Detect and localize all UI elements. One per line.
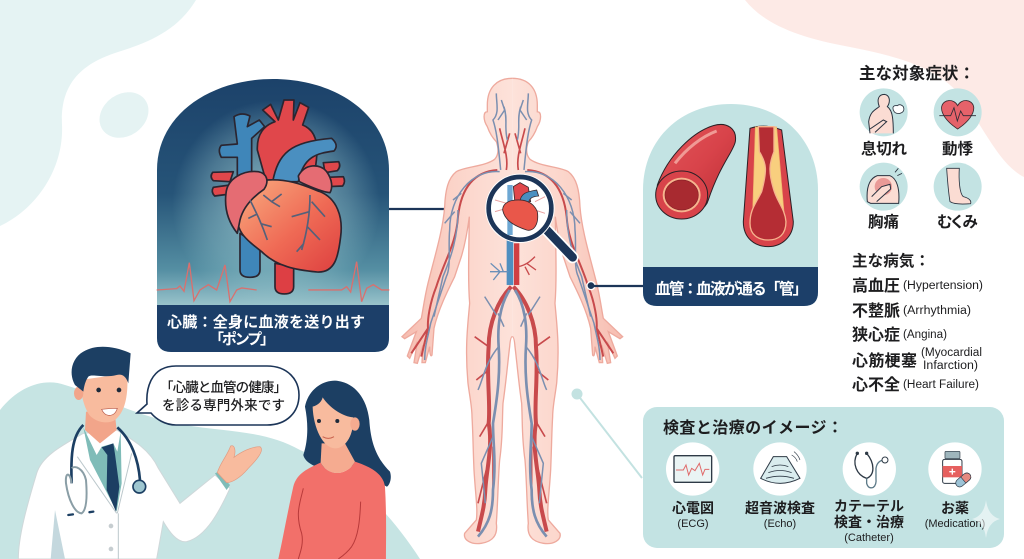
coat lapels <box>77 453 132 559</box>
sweater <box>278 462 386 559</box>
background blob: bottom left <box>0 382 420 559</box>
label: ECG: 心電図 <box>672 500 714 516</box>
label: catheter <box>834 498 904 544</box>
label: shortness of breath: 息切れ <box>861 139 907 158</box>
eyes <box>96 388 121 392</box>
label: echo <box>745 500 815 530</box>
hair <box>72 347 131 392</box>
heart illustration <box>211 100 344 294</box>
neck <box>321 443 355 473</box>
icon: echo <box>753 442 807 496</box>
background blob: top left <box>0 0 196 226</box>
disease: myocardial infarction: 心筋梗塞 <box>852 351 917 370</box>
panel: tests and treatment <box>643 407 1004 548</box>
bubble text line 2: を診る専門外来です <box>162 397 285 413</box>
healthy vessel <box>656 125 736 219</box>
label: swelling: むくみ <box>937 213 978 231</box>
coat shadow <box>51 510 65 559</box>
buttons <box>109 524 113 551</box>
shirt <box>83 427 122 512</box>
disease: hypertension <box>852 276 983 295</box>
panel: heart <box>157 79 389 352</box>
cuff <box>215 472 230 490</box>
human body with circulatory system <box>402 78 623 544</box>
bubble text line 1: 「心臓と血管の健康」 <box>160 379 287 395</box>
mini heart <box>495 183 545 235</box>
disease: hypertension: (Hypertension) <box>903 280 983 292</box>
icon: ECG <box>666 442 719 496</box>
sparkle <box>972 500 1000 538</box>
vessel marker dot <box>587 282 595 290</box>
panel background <box>643 104 818 306</box>
disease: arrhythmia <box>852 302 971 320</box>
hair <box>303 381 391 487</box>
disease: angina <box>852 326 947 344</box>
label text line 2: 「ポンプ」 <box>209 331 275 348</box>
tie <box>102 443 119 512</box>
label: chest pain: 胸痛 <box>868 213 899 231</box>
face <box>313 397 353 448</box>
label: catheter: (Catheter) <box>844 532 894 544</box>
disease: hypertension: 高血圧 <box>852 276 900 295</box>
label: medication: お薬 <box>941 500 969 516</box>
connector: heart panel to magnifier <box>389 208 490 210</box>
coat <box>18 430 230 559</box>
connector: vessel marker to vessel panel <box>591 285 644 287</box>
label: palpitation: 動悸 <box>942 140 973 158</box>
disease: angina: 狭心症 <box>852 326 900 344</box>
face <box>80 373 127 422</box>
disease: heart failure: 心不全 <box>852 375 900 394</box>
body mirrored half <box>402 78 512 544</box>
label text: 心臓：全身に血液を送り出す <box>167 313 365 331</box>
disease: myocardial infarction <box>852 347 982 372</box>
panel background <box>157 79 389 352</box>
icon: medication <box>928 442 982 496</box>
label: echo: (Echo) <box>764 518 796 530</box>
label text: 血管：血液が通る「管」 <box>655 279 808 298</box>
mouth <box>323 437 334 438</box>
heart glow <box>172 100 380 310</box>
decorative connector <box>572 388 642 478</box>
disease: myocardial infarction: Infarction) <box>923 360 978 372</box>
icon: palpitation <box>934 88 982 136</box>
symptoms section <box>852 63 983 394</box>
label bar <box>643 267 818 306</box>
background blob: top right <box>745 0 1024 177</box>
doctor <box>18 347 261 559</box>
bubble shape <box>137 366 299 425</box>
icon: swelling <box>934 163 982 211</box>
woman <box>278 381 391 559</box>
narrowed vessel with plaque <box>743 126 793 247</box>
label: medication: (Medication) <box>925 518 985 530</box>
disease: angina: (Angina) <box>903 329 947 341</box>
stethoscope <box>66 425 146 515</box>
label: ECG <box>672 500 714 530</box>
panel background <box>643 407 1004 548</box>
label: catheter: 検査・治療 <box>834 514 904 530</box>
main vessels <box>490 240 536 285</box>
label bar <box>157 305 389 352</box>
label: medication <box>925 500 985 530</box>
eyes <box>317 419 339 423</box>
label: ECG: (ECG) <box>677 518 709 530</box>
icon: shortness of breath <box>860 88 908 136</box>
disease: arrhythmia: (Arrhythmia) <box>903 305 971 317</box>
smile <box>102 408 117 415</box>
neck <box>85 412 117 443</box>
label: catheter: カテーテル <box>834 498 904 514</box>
heading: 検査と治療のイメージ： <box>663 418 843 437</box>
label: echo: 超音波検査 <box>745 500 815 516</box>
disease: arrhythmia: 不整脈 <box>852 302 900 320</box>
speech bubble <box>137 366 299 425</box>
disease: heart failure: (Heart Failure) <box>903 379 979 391</box>
panel: blood vessels <box>643 104 818 306</box>
sweater lines <box>298 488 361 559</box>
ear <box>350 417 360 431</box>
disease: heart failure <box>852 375 979 394</box>
ear <box>74 387 83 400</box>
body half <box>512 78 623 544</box>
disease: myocardial infarction: (Myocardial <box>921 347 982 359</box>
ECG line <box>157 262 389 302</box>
heading: symptoms: 主な対象症状： <box>859 63 975 83</box>
heading: diseases: 主な病気： <box>852 251 930 270</box>
hand <box>217 446 261 483</box>
magnifying glass <box>485 174 573 257</box>
icon: stethoscope <box>843 442 896 496</box>
icon: chest pain <box>860 163 908 211</box>
background oval: top left <box>91 83 157 147</box>
